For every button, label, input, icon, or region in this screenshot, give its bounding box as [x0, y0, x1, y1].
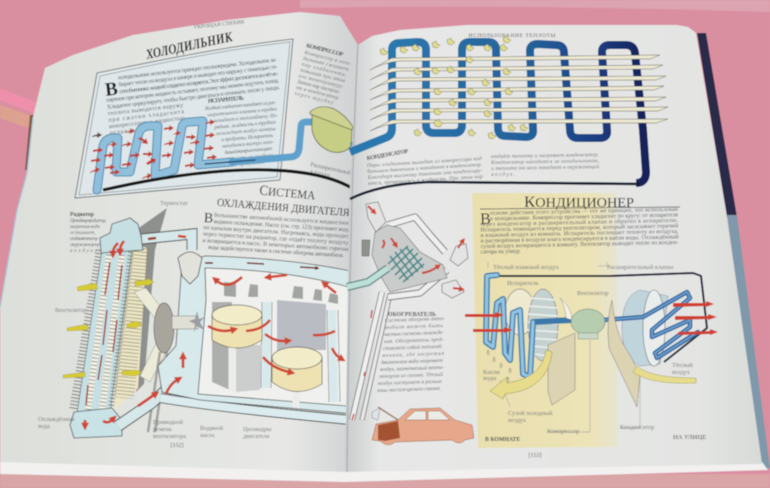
text block: air conditioner: и влажный воздух из комнаты. Испаритель поглощает теплоту из воздуха, [480, 228, 679, 239]
labels: air conditioner: Конденсатор [620, 424, 654, 431]
labels: air conditioner: Вентилятор [577, 290, 608, 297]
text block: heater: мобиля может быть [384, 322, 444, 331]
heater coil [388, 246, 424, 282]
yellow air arrows [63, 278, 154, 378]
diagram: heater core [347, 202, 468, 420]
labels: air conditioner: НА УЛИЦЕ [673, 434, 706, 441]
title: refrigerator: ХОЛОДИЛЬНИК [144, 30, 235, 63]
text block: condenser: большим давлением и попадают в конденсатор. [367, 161, 482, 175]
text block: air conditioner: основе действия этого устройства — тот же принцип, что использован [490, 206, 679, 217]
text block: evaporator: рядная, жидкость в трубках [213, 118, 277, 131]
icon: car with open hood [372, 407, 474, 445]
text block: evaporator: дильной камеры и поглощает [224, 145, 273, 156]
labels: air conditioner [483, 264, 706, 443]
text block: heater [376, 312, 445, 394]
text block: compressor: Компрессор в холо- [303, 50, 352, 67]
text block: heater: воздух поступает в разные [378, 378, 443, 387]
text block: compressor: пар хладагента, [301, 61, 348, 79]
teal inlet pipe [347, 268, 388, 287]
text block: evaporator [203, 93, 282, 170]
labels: air conditioner: воздух [672, 369, 691, 376]
cooling plates [370, 55, 668, 131]
text block: engine cooling: В [203, 211, 214, 227]
text block: heater: менник, где нагретая [381, 350, 445, 359]
condenser coil tube [603, 292, 698, 358]
condenser tube [350, 42, 646, 183]
labels: engine diagram: Охлаждённая [38, 416, 75, 423]
red heat arrows: evaporator [90, 119, 217, 179]
labels: engine diagram: вода [38, 423, 50, 430]
text block: heater: воздух, нагнетаемый венти- [380, 364, 444, 373]
heater body [372, 225, 447, 292]
text block: engine cooling: и возвращается в насос. В некоторых автомобилях горячая [202, 237, 349, 253]
text block: refrigerator intro: бирает тепло из воздуха в камере и выводит его наружу с помощью те- [118, 63, 278, 88]
labels: engine diagram: вентилятора [153, 433, 186, 440]
piston 1 [212, 305, 262, 348]
text block: condenser: КОНДЕНСАТОР [366, 149, 409, 162]
text block: air conditioner: и растворённая в воздухе влага конденсируется в капли воды. Охлаждённый [480, 233, 679, 244]
cylinder walls [212, 302, 232, 390]
text block: heater: Система обогрева авто- [385, 315, 445, 324]
head chambers [224, 282, 338, 304]
pump impeller [189, 311, 205, 332]
engine block castings [198, 268, 352, 406]
text block: engine cooling: через термостат на радиатор, где отдаёт теплоту воздуху [203, 231, 349, 246]
cream baffle panels [548, 333, 575, 405]
text block: refrigerator intro: Хладагент циркулирует, чтобы быстро двигаться и отнимать тепло у пищи. [107, 84, 281, 111]
water channels [266, 302, 334, 402]
labels: engine diagram: окружающему [70, 242, 101, 248]
engine coolant jacket [158, 256, 355, 414]
right page [345, 25, 762, 472]
text block: compressor: ет в конденсатор [295, 84, 340, 101]
radiator body [77, 250, 132, 413]
upper hose to thermostat [142, 234, 192, 250]
piston rods [232, 345, 296, 408]
manifold arrows [205, 263, 316, 268]
labels: engine diagram: ремень [153, 426, 172, 433]
evaporator fan ring [505, 289, 535, 335]
radiator top tank [100, 218, 143, 253]
text block: refrigerator intro: плообменника: жидкий хладагент испаряется. Этот эффект достигается за счёт ис- [119, 70, 279, 95]
piston 2 [272, 347, 322, 392]
striped cover edge [727, 215, 770, 470]
text block: air conditioner: сатора на улицу. [481, 249, 521, 255]
text block: engine cooling: водяное охлаждение. Насос (см. стр. 123) прогоняет воду [213, 218, 350, 233]
icon: compressor housing [310, 107, 358, 152]
text block: evaporator: ширительного клапана в трубки [207, 105, 278, 118]
text block: condenser: Конденсатор находится за холодильником, [490, 157, 600, 166]
text block: refrigerator intro: холодильнике используется принцип теплопередачи. Холодильник за- [117, 57, 277, 81]
heater pipes [352, 217, 447, 420]
labels: air conditioner: Компрессор [547, 428, 579, 435]
text block: evaporator: и продукты. Испаритель [221, 132, 274, 143]
pump shaft [172, 316, 198, 329]
text block: evaporator: и попадает к теплообмену. Из- [209, 112, 278, 125]
radiator core ladders [88, 252, 131, 410]
text block: condenser: ются, превращаясь в жидкость. При этом пар [368, 173, 483, 187]
text block: refrigerator intro: охлаждается. [110, 126, 151, 137]
condenser fan drum [622, 290, 668, 366]
pulley hub [154, 303, 174, 353]
fan belt [148, 352, 167, 432]
panel: air conditioner [465, 193, 718, 448]
labels: engine diagram: нагретая вода [70, 223, 100, 230]
page stack along the bottom [0, 460, 768, 482]
text block: heater: зоны пассажирского салона. [376, 386, 441, 394]
black refrigerant line [494, 273, 707, 362]
labels: engine diagram: Проходя через радиатор, [69, 217, 107, 224]
panel: refrigerator frame [75, 30, 314, 198]
yellow air arrows [490, 350, 696, 399]
text block: evaporator: теплоту из воздуха [225, 151, 274, 163]
text block: compressor: его температуру. [298, 73, 344, 90]
text block: evaporator: находится внутри холо- [222, 138, 274, 150]
return black line [350, 182, 640, 199]
text block: compressor [293, 43, 354, 108]
refrigerant black return line [103, 170, 358, 192]
text block: compressor: повышая при этом [299, 67, 346, 84]
labels: air conditioner: воздух [508, 417, 527, 424]
text block: heater: лятором из салона. Тёплый [378, 371, 443, 380]
label: expansion valve: Расширительный [310, 161, 353, 177]
text block: evaporator: ИСПАРИТЕЛЬ [208, 96, 244, 105]
text block: refrigerator intro [104, 57, 284, 137]
text block: condenser: и теплота от него попадает в окружающий [491, 163, 600, 172]
labels: engine diagram: Термостат [160, 200, 188, 207]
text block: condenser: Благодаря высокому давлению они конденсиру- [366, 167, 483, 181]
text block: compressor: КОМПРЕССОР [306, 43, 344, 58]
text block: condenser [366, 149, 600, 187]
diagram: air conditioning unit [465, 262, 718, 443]
mechanical parts [362, 240, 370, 256]
compressor [571, 309, 605, 339]
title: engine cooling: СИСТЕМА [259, 184, 316, 203]
text block: condenser: Пары хладагента выходят из компрессора под [366, 155, 482, 169]
diagram: engine cooling [38, 200, 355, 440]
radiator fin teeth, left [73, 250, 100, 410]
labels: air conditioner: Расширительный клапан [607, 264, 674, 271]
title: engine cooling [216, 184, 351, 219]
labels: engine diagram: Водяной [200, 425, 224, 432]
lower hose [118, 380, 178, 426]
labels: engine diagram: остывает, [70, 230, 97, 236]
text block: evaporator: Жидкий хладагент попадает из рас- [203, 99, 277, 112]
title: engine cooling: ОХЛАЖДЕНИЯ ДВИГАТЕЛЯ [216, 197, 351, 219]
labels: air conditioner: Капли [483, 369, 500, 376]
labels: air conditioner: Тёплый влажный воздух [493, 264, 560, 271]
text block: engine cooling: по каналам внутри двигателя. Нагреваясь, вода проходит [203, 225, 350, 240]
text block: air conditioner: В [480, 211, 491, 228]
red heater arrows [352, 206, 462, 420]
radiator fins [113, 245, 147, 412]
labels: engine diagram: насос [200, 432, 215, 439]
text block: refrigerator intro: при сжатии хладагента [108, 109, 185, 124]
text block: evaporator: охлаждает воздух камеры [216, 125, 276, 137]
labels: engine diagram: Вентилятор [55, 307, 86, 314]
labels: air conditioner: Тёплый [672, 362, 693, 369]
title: air conditioner: КОНДИЦИОНЕР [524, 194, 634, 211]
text block: heater: ставляет собой теплооб- [383, 343, 443, 352]
text block: engine cooling [202, 211, 350, 259]
page number: 152: [152] [170, 443, 184, 449]
labels: air conditioner: Сухой холодный [508, 410, 553, 417]
text block: condenser: отдаёт теплоту и нагревает конденсатор. [491, 151, 599, 160]
text block: compressor: дильнике сжимает [302, 55, 350, 73]
text block: refrigerator intro: парения при котором жидкость остывает, поэтому мы можем ощутить холод. [106, 78, 280, 104]
page number: 153: [153] [528, 453, 542, 459]
text block: compressor: через трубку. [294, 90, 336, 107]
diagram: condenser [350, 36, 668, 199]
label: expansion valve: клапан [310, 168, 331, 179]
radiator bottom tank [70, 408, 122, 438]
labels: air conditioner: воды [483, 375, 497, 382]
water drops [487, 350, 511, 382]
evaporator fan drum [528, 289, 558, 361]
labels: engine diagram: Радиатор [70, 212, 94, 218]
text block: condenser: воздух. [491, 171, 515, 178]
text block: refrigerator intro: В [104, 79, 119, 101]
dark book cover edge [697, 33, 737, 217]
thermostat [178, 252, 202, 284]
labels: engine diagram: Цилиндры [243, 426, 272, 433]
left page [0, 12, 358, 472]
text block: heater: ОБОГРЕВАТЕЛЬ [388, 312, 436, 318]
text block: compressor: Затем пар поступа- [297, 79, 341, 96]
label leader lines [488, 262, 640, 432]
text block: air conditioner: через конденсатор и расширительный клапан и обратно к испарителю. [480, 217, 679, 228]
text block: air conditioner: в холодильнике. Компрессор прогоняет хладагент по кругу: от испарителя [490, 212, 678, 222]
labels: engine diagram: отдавая теплоту [70, 235, 99, 242]
labels: air conditioner: В КОМНАТЕ [485, 437, 520, 443]
evaporator tube [486, 275, 698, 377]
labels: engine diagram: двигателя [243, 433, 269, 440]
text block: engine cooling: вода задействуется также в системе обогрева автомобиля. [208, 244, 345, 259]
text block: engine cooling: большинстве автомобилей используется жидкостное [214, 212, 350, 227]
labels: air conditioner: Испаритель [507, 280, 539, 287]
coolant flow arrows [85, 236, 340, 424]
bottom engine return [160, 398, 350, 420]
text block: heater: ния. Обогреватель пред- [384, 336, 444, 345]
labels: engine diagram: воздуху. [70, 247, 100, 254]
red warm-air arrows [465, 301, 718, 335]
text block: air conditioner [480, 206, 680, 255]
evaporator tube [97, 121, 314, 190]
text block: refrigerator intro: теплота выводится наружу [107, 103, 184, 117]
text block: refrigerator intro: компрессором и жидкостью [109, 116, 186, 130]
fan blades [134, 288, 170, 382]
yellow heat markers [380, 36, 528, 139]
radiator gray back panel [134, 208, 167, 392]
running header: left page: УКРОЩАЯ СТИХИИ [193, 19, 245, 31]
text block: air conditioner: сухой воздух возвращается в комнату. Вентилятор выводит тепло из конден- [481, 239, 679, 250]
labels: engine diagram [38, 200, 272, 440]
text block: air conditioner: Испаритель помещается перед вентилятором, который засасывает горячий [480, 222, 679, 233]
text block: heater: двигателем вода нагревает [381, 357, 443, 366]
running header: heat use: ИСПОЛЬЗОВАНИЕ ТЕПЛОТЫ [468, 33, 556, 39]
text block: evaporator: и продуктов. [234, 159, 265, 168]
text block: heater: частью системы охлажде- [384, 329, 444, 338]
labels: engine diagram: Приводной [153, 419, 184, 426]
